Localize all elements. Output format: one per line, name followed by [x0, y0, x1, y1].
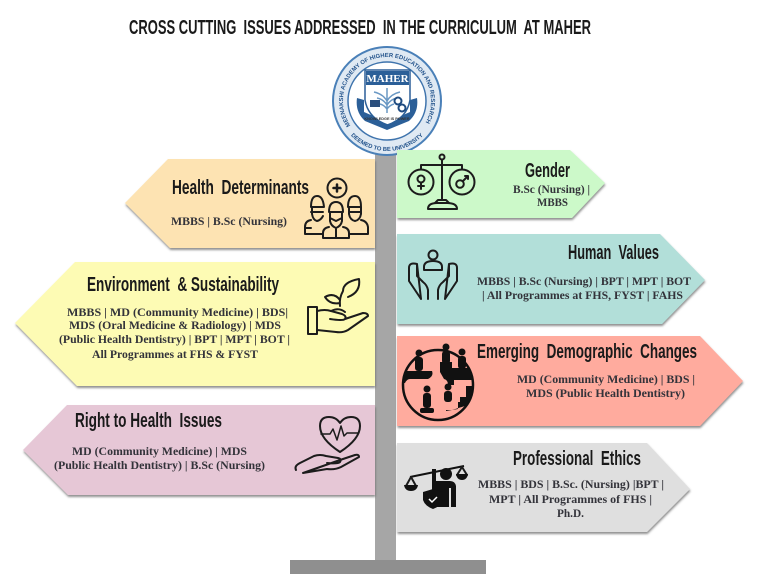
panel: professional ethics [397, 443, 690, 532]
programmes: emerging demographic changes: MDS (Public Health Dentistry) [526, 386, 685, 400]
panel: emerging demographic changes [397, 336, 743, 426]
programmes: right to health issues [54, 444, 265, 472]
heading: right to health issues: Right to Health Issues [75, 410, 222, 432]
logo: MAHER seal: KNOWLEDGE IS POWER [364, 117, 410, 121]
programmes: professional ethics: Ph.D. [557, 506, 584, 520]
logo: MAHER seal: DEEMED TO BE UNIVERSITY [351, 132, 422, 151]
programmes: professional ethics: MPT | All Programmes of FHS | [489, 492, 652, 506]
programmes: environment and sustainability: MDS (Oral Medicine & Radiology) | MDS [69, 318, 281, 332]
icon: hands holding person [409, 250, 457, 299]
logo: MAHER seal: MAHER [366, 73, 410, 85]
programmes: gender: MBBS [537, 195, 568, 209]
panel: gender [397, 150, 605, 218]
programmes: gender [513, 182, 590, 209]
heading: gender: Gender [525, 160, 570, 182]
programmes: human values [477, 274, 691, 302]
programmes: human values: MBBS | B.Sc (Nursing) | BPT | MPT | BOT [477, 274, 691, 288]
signpost base [290, 560, 486, 574]
heading: health determinants: Health Determinants [172, 177, 309, 199]
programmes: environment and sustainability: (Public Health Dentistry) | BPT | MPT | BOT | [59, 332, 290, 346]
logo: MAHER seal: MEENAKSHI ACADEMY OF HIGHER EDUCATION AND RESEARCH [338, 52, 436, 128]
heading: professional ethics: Professional Ethics [513, 448, 641, 470]
programmes: environment and sustainability: All Programmes at FHS & FYST [92, 347, 258, 361]
icon: ethics scales and person [404, 466, 468, 509]
programmes: emerging demographic changes: MD (Community Medicine) | BDS | [517, 372, 695, 386]
programmes: professional ethics: MBBS | BDS | B.Sc. (Nursing) |BPT | [478, 477, 664, 491]
panel: right to health issues [23, 405, 375, 495]
panel: health determinants [125, 159, 375, 248]
programmes: health determinants: MBBS | B.Sc (Nursing) [171, 214, 287, 228]
panel: environment and sustainability [15, 262, 375, 386]
heading: human values: Human Values [568, 242, 659, 264]
signpost pole [375, 150, 396, 562]
icon: medical team [305, 178, 368, 238]
panel: human values [397, 234, 705, 324]
programmes: professional ethics [478, 477, 664, 520]
icon: hand holding heart [296, 417, 360, 473]
programmes: environment and sustainability: MBBS | MD (Community Medicine) | BDS| [67, 305, 288, 319]
icon: hand holding plant [308, 279, 368, 334]
programmes: environment and sustainability [59, 305, 290, 361]
logo: MAHER seal [332, 46, 442, 156]
programmes: right to health issues: (Public Health Dentistry) | B.Sc (Nursing) [54, 458, 265, 472]
heading: environment and sustainability: Environment & Sustainability [87, 274, 280, 296]
icon: gender scales [408, 154, 474, 209]
programmes: gender: B.Sc (Nursing) | [513, 182, 590, 196]
programmes: emerging demographic changes [517, 372, 695, 400]
icon: people on steps [400, 344, 476, 420]
programmes: human values: | All Programmes at FHS, FYST | FAHS [482, 288, 683, 302]
programmes: right to health issues: MD (Community Medicine) | MDS [72, 444, 247, 458]
